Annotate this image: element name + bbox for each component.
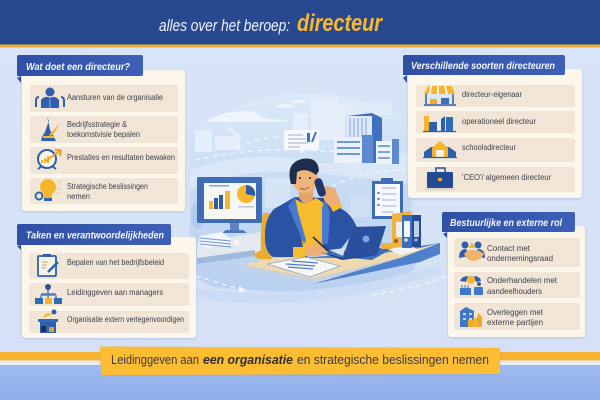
banner	[100, 346, 500, 375]
person	[254, 158, 357, 259]
buildings	[334, 113, 399, 164]
clipboard	[372, 178, 403, 219]
item: Organisatie: Organisatie extern vertegenvoordigen	[67, 315, 184, 324]
neck and head	[299, 188, 313, 205]
item: Leidinggeven	[35, 284, 163, 304]
item: Prestaties: Prestaties en resultaten bewaken	[67, 153, 175, 162]
dashed routes	[195, 137, 447, 295]
item: Overleggen: Overleggen met	[487, 308, 544, 317]
shirt	[295, 198, 325, 248]
item: directeur-eigenaar: directeur-eigenaar	[462, 90, 522, 99]
item: Bepalen	[38, 254, 164, 276]
title	[159, 10, 383, 37]
paper on desk	[267, 257, 340, 277]
item: Bedrijfsstrategie: Bedrijfsstrategie &	[67, 120, 128, 129]
item: schoolsdirecteur: schoolsdirecteur	[462, 143, 516, 152]
jacket	[265, 197, 357, 257]
chair	[254, 213, 272, 259]
item: CEO: 'CEO'/ algemeen directeur	[462, 173, 551, 182]
item: schoolsdirecteur	[423, 141, 516, 158]
item: Onderhandelen: aandeelhouders	[487, 287, 542, 296]
platform desk	[243, 243, 440, 284]
item: Aansturen	[36, 88, 164, 108]
heading: Bestuurlijke en externe rol: Bestuurlijke en externe rol	[450, 218, 562, 229]
heading: Taken en verantwoordelijkheden	[17, 224, 171, 250]
item: Onderhandelen	[460, 276, 558, 296]
heading: Wat doet een directeur: Wat doet een directeur?	[26, 62, 130, 73]
heading: Verschillende soorten directeuren: Verschillende soorten directeuren	[411, 61, 555, 72]
item: Contact: Contact met	[487, 244, 531, 253]
item: Bedrijfsstrategie	[41, 117, 140, 141]
panel: Bestuurlijke en externe rol	[442, 212, 585, 337]
banner: en strategische beslissingen nemen	[297, 352, 489, 367]
banner: een organisatie	[203, 352, 293, 367]
heading: Bestuurlijke en externe rol	[442, 212, 575, 238]
binders	[381, 211, 421, 249]
heading: Taken en verantwoordelijkheden: Taken en verantwoordelijkheden	[26, 230, 164, 242]
monitor	[197, 177, 262, 233]
item: Bedrijfsstrategie: toekomstvisie bepalen	[67, 130, 140, 139]
item: operationeel directeur: operationeel directeur	[462, 117, 536, 126]
item: operationeel directeur	[423, 116, 536, 132]
item: Prestaties	[38, 150, 175, 169]
item: Overleggen: externe partijen	[487, 318, 543, 327]
header bar	[0, 0, 600, 48]
item: Bepalen: Bepalen van het bedrijfsbeleid	[67, 258, 164, 267]
speech bubble	[284, 130, 319, 154]
banner text: Leidinggeven aan	[111, 352, 199, 367]
item: Organisatie	[38, 310, 184, 333]
heading: Wat doet een directeur	[17, 55, 143, 83]
item: Onderhandelen: Onderhandelen met	[487, 276, 558, 285]
central illustration	[190, 93, 447, 303]
lapels	[288, 197, 330, 244]
item: Overleggen	[460, 307, 544, 327]
laptop	[320, 226, 386, 260]
footer band	[0, 352, 600, 400]
item: Leidinggeven: Leidinggeven aan managers	[67, 288, 163, 297]
title: directeur	[297, 10, 383, 37]
panel: Wat doet een directeur	[17, 55, 185, 211]
document on desk	[388, 246, 420, 255]
item: Contact: ondernemingsraad	[487, 254, 553, 263]
arm, hand and phone	[324, 186, 342, 210]
panel: Taken en verantwoordelijkheden	[17, 224, 196, 338]
item: Contact	[459, 242, 553, 263]
item: Aansturen: Aansturen van de organisatie	[67, 93, 164, 102]
item: directeur-eigenaar	[424, 86, 522, 105]
item: Strategische beslissingen: Strategische beslissingen	[67, 182, 148, 191]
panel: Verschillende soorten directeuren	[403, 55, 582, 198]
heading: Verschillende soorten directeuren	[403, 55, 565, 83]
faint skyline	[190, 98, 415, 229]
side desk and stack of papers	[197, 232, 262, 264]
item: Strategische beslissingen: nemen	[67, 192, 90, 201]
title: alles over het beroep:	[159, 16, 290, 35]
sky backdrop	[190, 93, 440, 303]
writing hand	[293, 247, 305, 257]
item: CEO	[425, 168, 551, 189]
item: Strategische beslissingen	[36, 179, 148, 201]
